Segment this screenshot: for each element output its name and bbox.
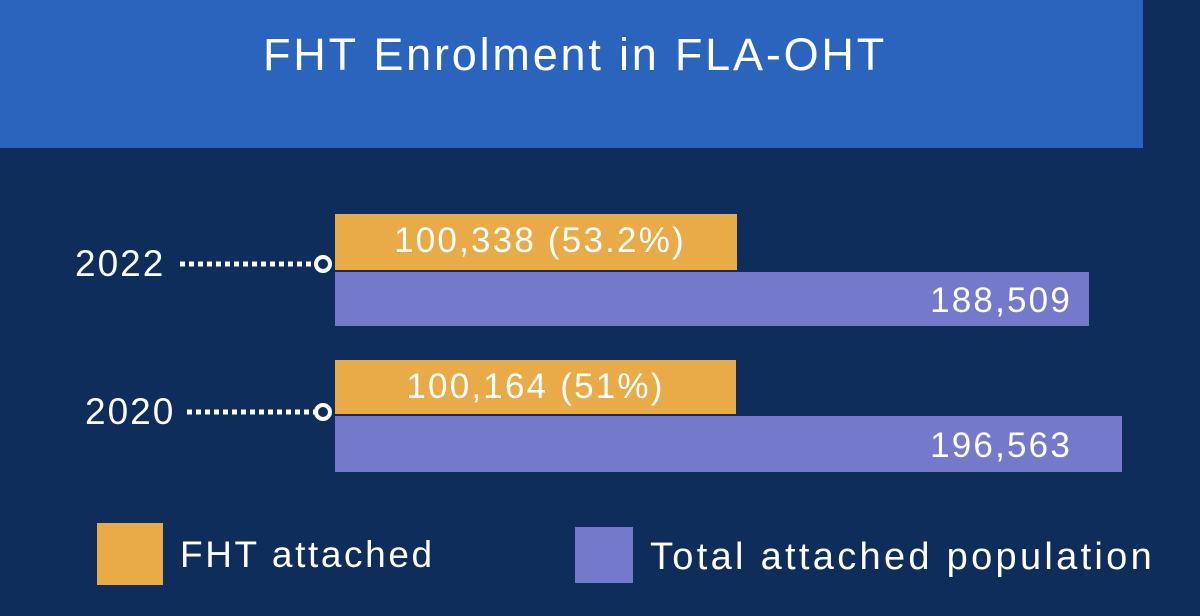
legend text FHT attached: FHT attached — [180, 534, 435, 575]
title: FHT Enrolment in FLA-OHT — [263, 29, 887, 80]
year label 2022: 2022 — [75, 243, 165, 284]
legend swatch total — [575, 527, 633, 583]
connector 2022 — [180, 255, 332, 273]
legend swatch FHT attached — [97, 523, 163, 585]
bar 2022 total — [335, 272, 1089, 326]
bar 2020 FHT attached — [335, 360, 736, 414]
legend text total: Total attached population — [650, 536, 1155, 578]
bar 2022 FHT attached: 100,338 (53.2%) — [394, 221, 686, 260]
bar chart — [75, 214, 1122, 472]
bar 2020 FHT attached: 100,164 (51%) — [406, 367, 665, 406]
year label 2020: 2020 — [85, 391, 175, 432]
legend — [97, 523, 1155, 585]
connector 2020 — [187, 403, 332, 421]
header band — [0, 0, 1143, 148]
bar 2022 total: 188,509 — [930, 281, 1072, 320]
bar 2020 total: 196,563 — [930, 426, 1072, 465]
bar 2020 total — [335, 416, 1122, 472]
bar 2022 FHT attached — [335, 214, 737, 270]
